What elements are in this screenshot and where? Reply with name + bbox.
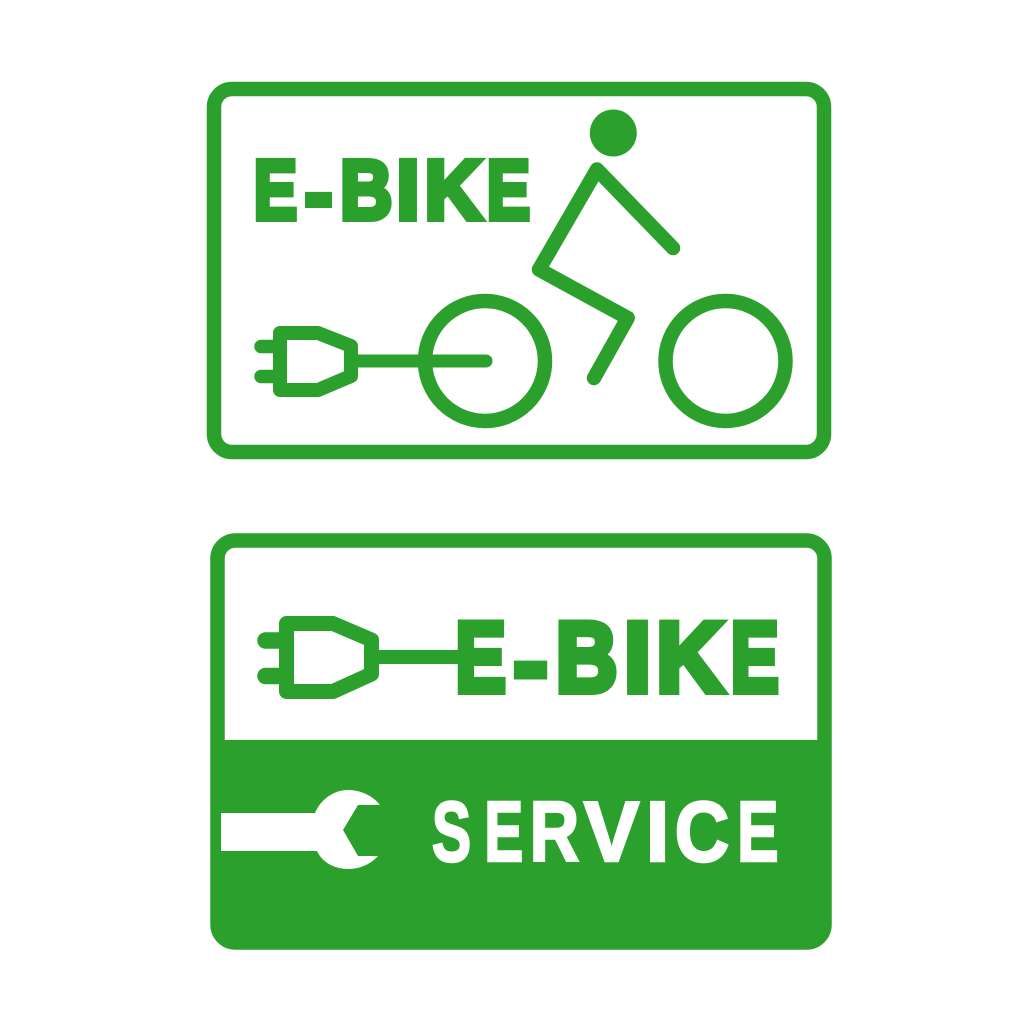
heading: E-BIKE: E xyxy=(731,602,779,712)
heading: E-BIKE: - xyxy=(514,606,548,717)
service band xyxy=(210,740,832,949)
text: SERVICE: C xyxy=(675,785,729,880)
heading: E-BIKE: I xyxy=(396,143,420,237)
icon: cyclist xyxy=(425,110,786,421)
text: SERVICE: V xyxy=(584,785,640,880)
sign border xyxy=(218,540,824,942)
text: SERVICE: I xyxy=(646,785,670,880)
text: SERVICE: E xyxy=(484,785,523,880)
heading: E-BIKE: B xyxy=(556,602,618,712)
text: SERVICE: R xyxy=(530,785,579,880)
panel: e-bike service sign xyxy=(210,540,832,949)
text: SERVICE: S xyxy=(432,785,471,880)
panel: e-bike sign xyxy=(214,89,824,452)
heading: E-BIKE xyxy=(254,143,530,240)
text: SERVICE: E xyxy=(737,785,779,880)
text: SERVICE xyxy=(432,785,779,880)
sign border xyxy=(214,89,824,452)
icon: wrench xyxy=(221,790,380,869)
heading: E-BIKE: B xyxy=(340,143,392,237)
heading: E-BIKE: E xyxy=(254,143,297,237)
heading: E-BIKE: - xyxy=(305,146,332,240)
heading: E-BIKE: E xyxy=(487,143,530,237)
heading: E-BIKE: K xyxy=(425,143,482,237)
heading: E-BIKE: I xyxy=(624,602,651,712)
icon: plug and cable xyxy=(266,624,460,692)
heading: E-BIKE: E xyxy=(455,602,506,712)
heading: E-BIKE: K xyxy=(656,602,724,712)
icon: plug and cable xyxy=(261,333,486,390)
heading: E-BIKE xyxy=(455,602,779,717)
